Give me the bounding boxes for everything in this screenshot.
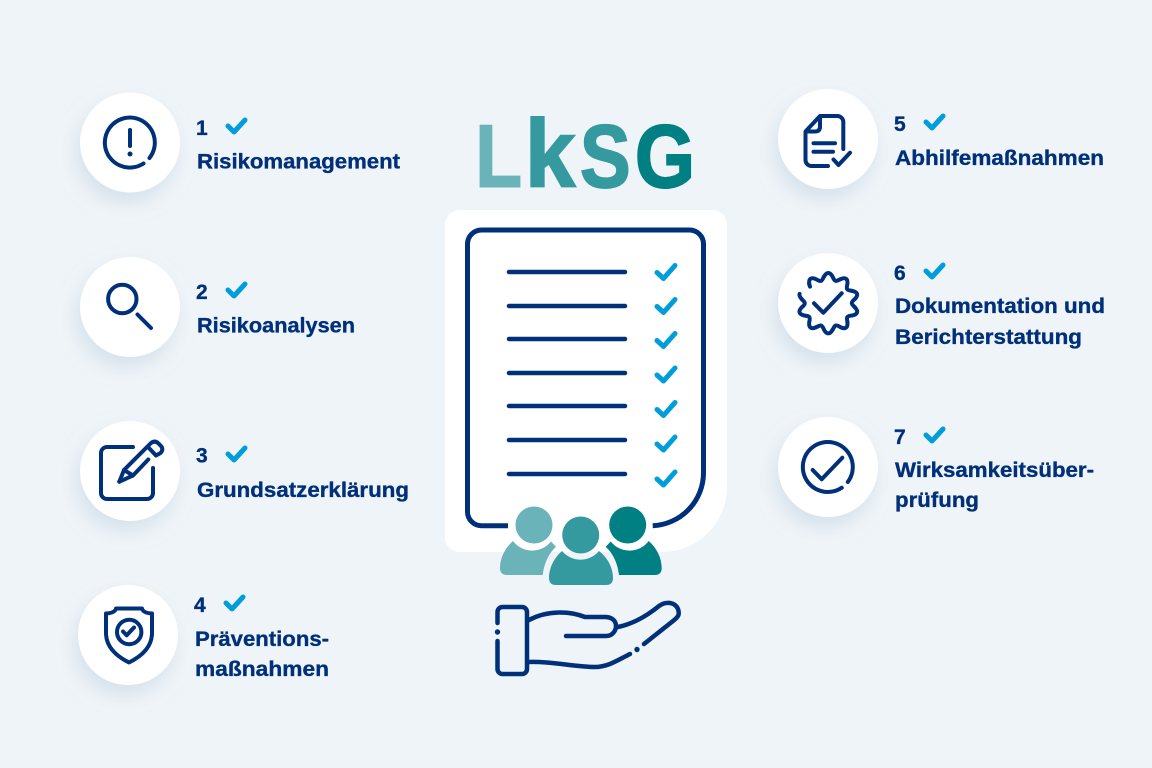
number and check 4 [194, 594, 243, 617]
label: Abhilfemaßnahmen: Abhilfemaßnahmen [895, 147, 1104, 170]
label: Risikomanagement: Risikomanagement [197, 150, 400, 173]
item 6: Dokumentation und Berichterstattung [778, 253, 1105, 353]
label: Dokumentation und Berichterstattung: Berichterstattung [895, 326, 1082, 349]
number and check 2 [196, 281, 245, 304]
label: Wirksamkeitsüberprüfung: Wirksamkeitsüber- [895, 459, 1094, 482]
item 3: Grundsatzerklärung [80, 421, 409, 521]
title: LkSG: S [580, 106, 631, 206]
number and check 3: 3 [196, 445, 208, 468]
icon: seal with check [778, 253, 878, 353]
number and check 7: 7 [894, 426, 906, 449]
item 4: Präventionsmaßnahmen [78, 585, 329, 685]
number and check 1: 1 [196, 117, 208, 140]
item 5: Abhilfemaßnahmen [778, 89, 1104, 189]
title: LkSG: L [475, 106, 522, 206]
icon: circle with check [778, 417, 878, 517]
title: LkSG: G [635, 106, 695, 206]
number and check 5: 5 [894, 113, 906, 136]
icon: open hand [495, 603, 679, 674]
label: Grundsatzerklärung: Grundsatzerklärung [197, 479, 409, 502]
title: LkSG: k [525, 100, 576, 208]
label: Dokumentation und Berichterstattung [895, 295, 1105, 349]
number and check 6: 6 [894, 262, 906, 285]
label: Wirksamkeitsüberprüfung: prüfung [895, 489, 979, 512]
item 7: Wirksamkeitsüberprüfung [778, 417, 1094, 517]
title: LkSG [475, 100, 695, 208]
label: Präventionsmaßnahmen: maßnahmen [195, 658, 329, 681]
label: Risikoanalysen: Risikoanalysen [197, 315, 355, 338]
number and check 4: 4 [194, 594, 206, 617]
label: Präventionsmaßnahmen: Präventions- [195, 628, 329, 651]
number and check 5 [894, 113, 943, 136]
label: Dokumentation und Berichterstattung: Dokumentation und [895, 295, 1105, 318]
icon: shield with check [78, 585, 178, 685]
icon: magnifier [80, 257, 180, 357]
label: Präventionsmaßnahmen [195, 628, 329, 681]
number and check 3 [196, 445, 245, 468]
number and check 2: 2 [196, 281, 208, 304]
icon: pencil on square [80, 421, 180, 521]
label: Wirksamkeitsüberprüfung [895, 459, 1094, 512]
number and check 7 [894, 426, 943, 449]
item 2: Risikoanalysen [80, 257, 355, 357]
icon: warning circle [80, 92, 180, 192]
number and check 1 [196, 117, 245, 140]
icon: three people [500, 506, 662, 585]
icon: document with check [778, 89, 878, 189]
panel: checklist document [445, 210, 727, 552]
item 1: Risikomanagement [80, 92, 400, 192]
number and check 6 [894, 262, 943, 285]
